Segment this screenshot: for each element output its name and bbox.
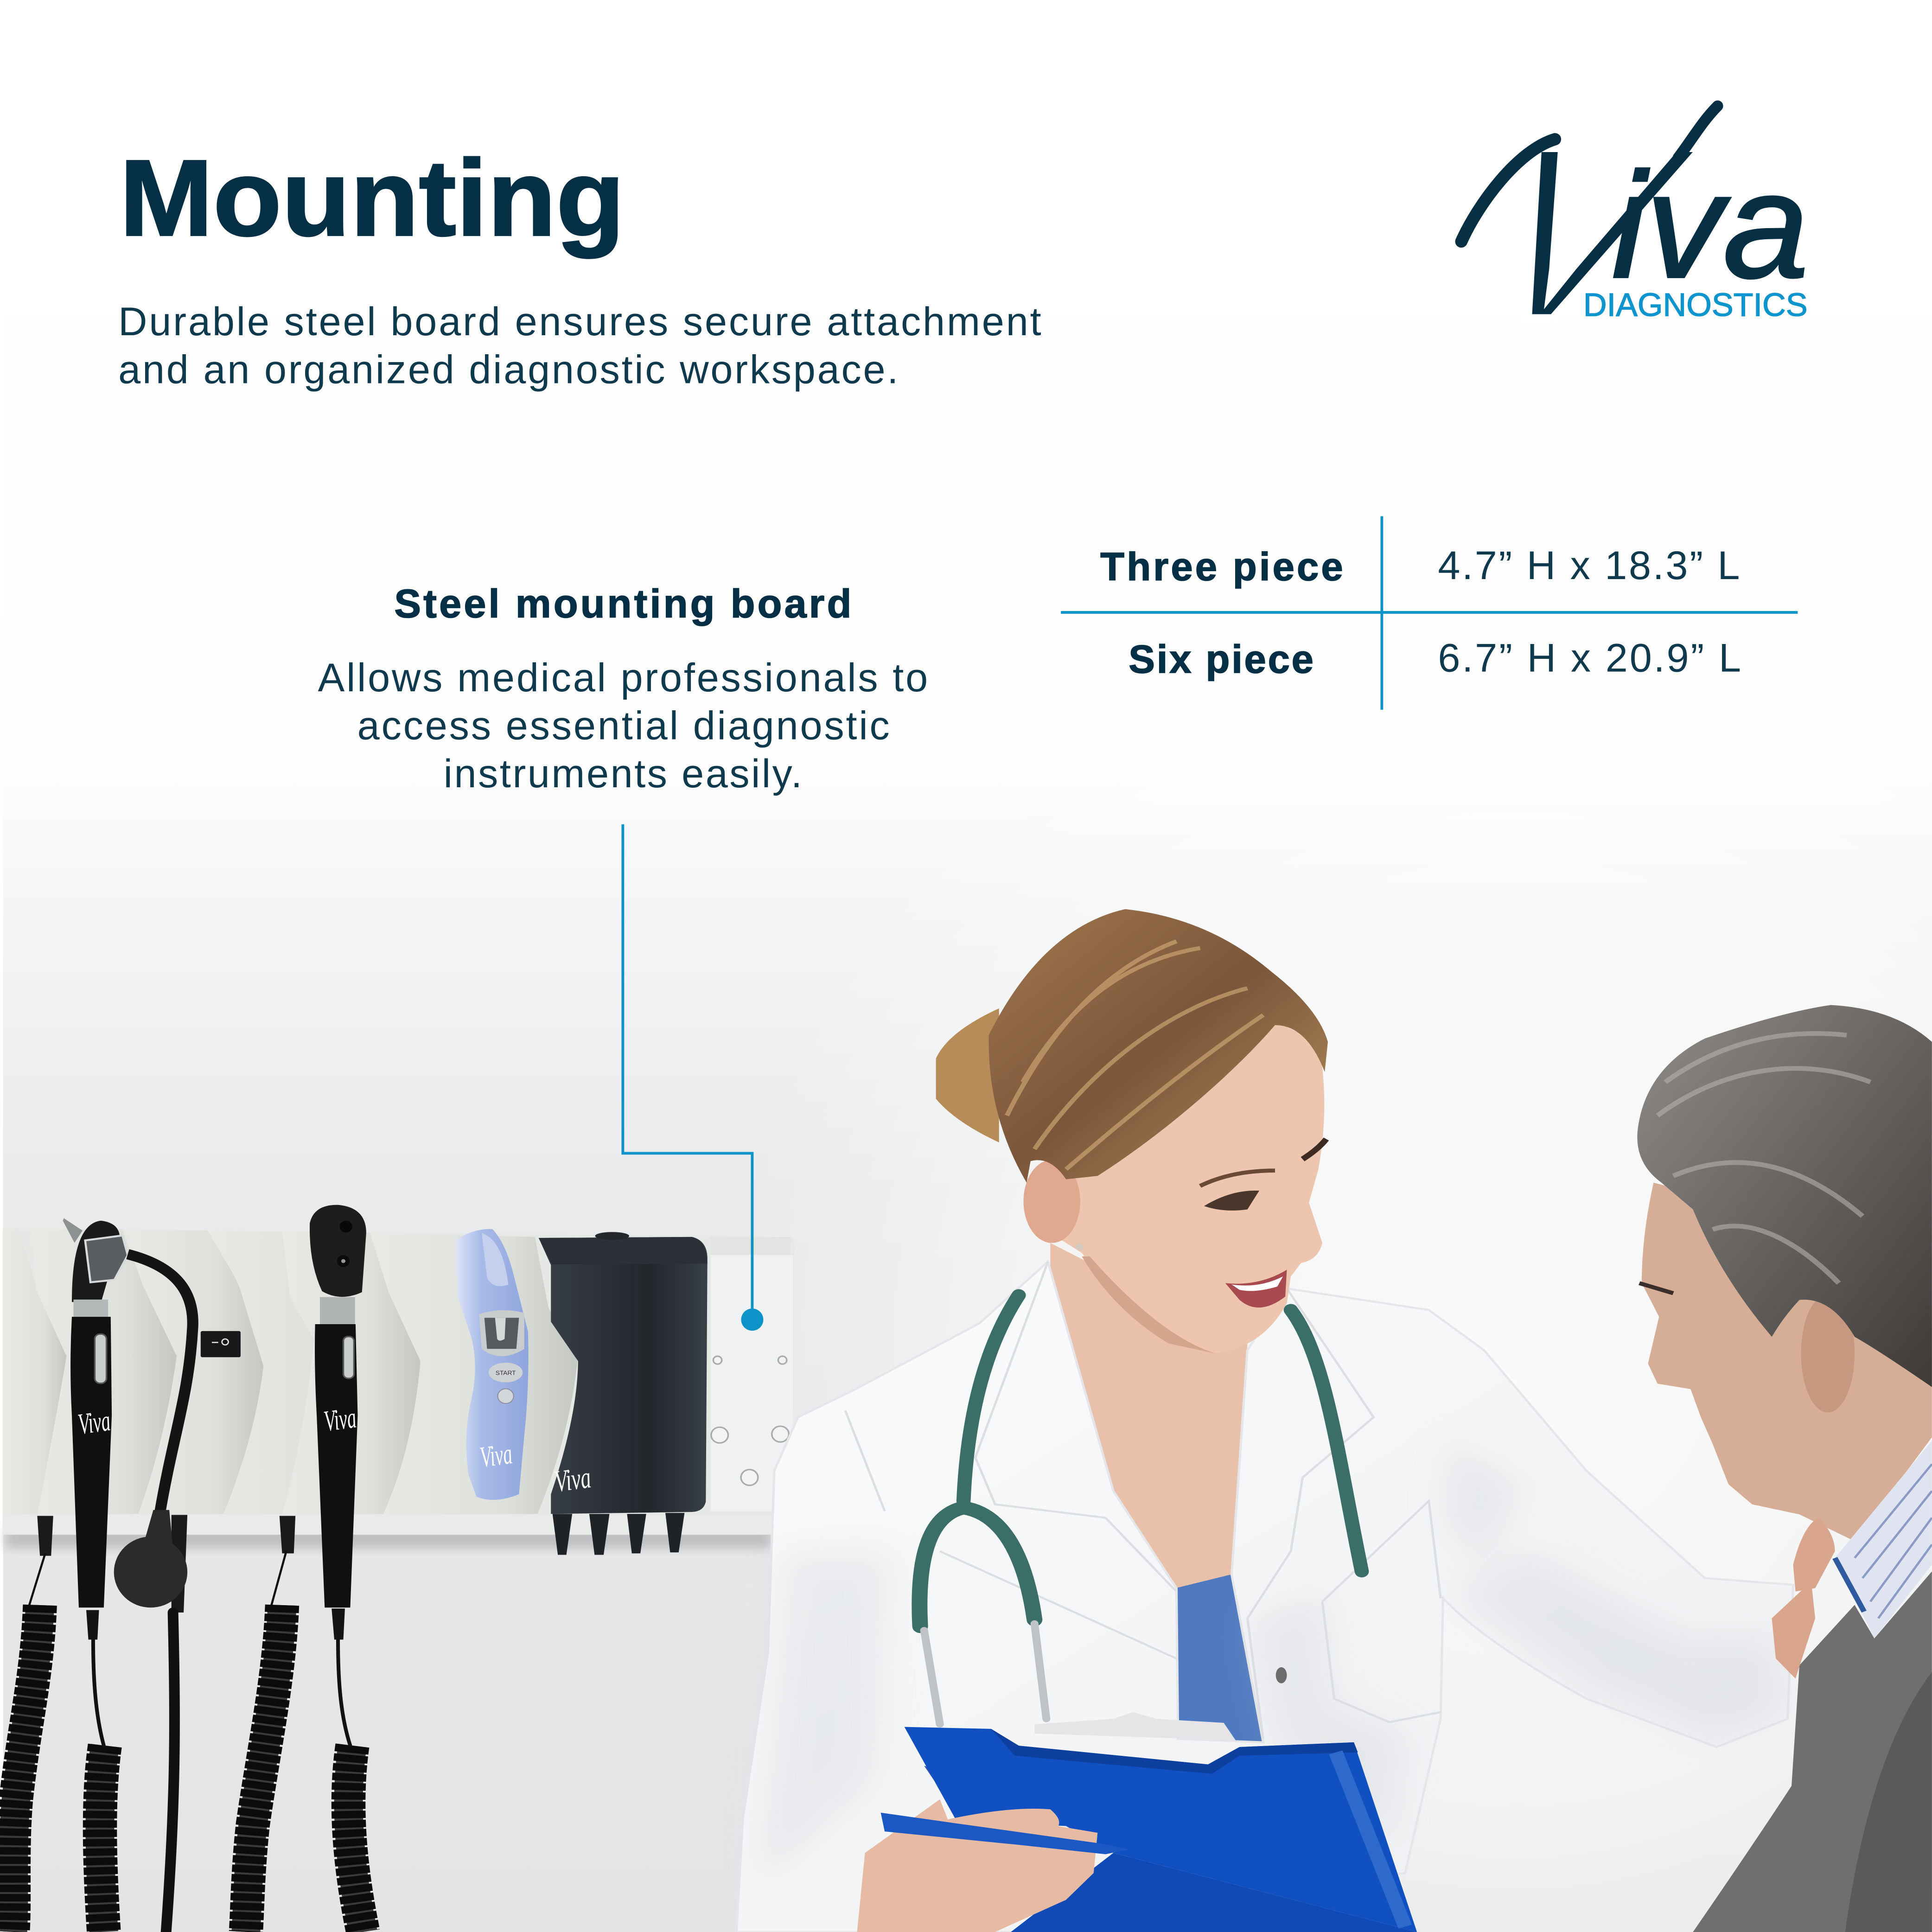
row: three piece (1100, 543, 1740, 589)
logo subtitle: DIAGNOSTICS (1583, 287, 1808, 323)
callout: steel mounting board (318, 581, 928, 1331)
doctor: hand on shoulder (1772, 1518, 1835, 1679)
logo: Viva Diagnostics (1433, 95, 1809, 370)
steel mounting board (3, 1228, 794, 1535)
title: Mounting (120, 137, 625, 259)
coiled tube and bulb (114, 1254, 193, 1607)
thin handle leads and power cable (93, 1613, 350, 1932)
row: six piece (1129, 636, 1741, 682)
intro text: Durable steel board ensures secure attachment (118, 300, 1041, 344)
clipboard (905, 1712, 1417, 1932)
doctor: stethoscope (919, 1295, 1362, 1724)
doctor: hair (936, 909, 1328, 1183)
coat shading (759, 1437, 1784, 1887)
instrument handle: otoscope (63, 1218, 128, 1639)
doctor: white coat (736, 1262, 1793, 1932)
power switch (201, 1331, 241, 1357)
charging handle sockets (37, 1515, 295, 1613)
box brand label: Viva (552, 1460, 593, 1498)
thermometer brand label: Viva (478, 1437, 514, 1474)
row: six piece: Six piece (1129, 638, 1314, 682)
callout heading: Steel mounting board (394, 581, 851, 626)
photo: doctor and patient (736, 909, 1932, 1932)
callout body: instruments easily. (444, 752, 802, 796)
instrument handle: ophthalmoscope: Viva (322, 1402, 358, 1438)
row: six piece: 6.7” H x 20.9” L (1438, 636, 1741, 680)
doctor: blue shirt (1176, 1574, 1265, 1742)
callout body: Allows medical professionals to (318, 656, 928, 700)
doctor: hand and pen (857, 1799, 1129, 1932)
thermometer button label: START (496, 1370, 516, 1376)
callout dot (741, 1308, 763, 1331)
patient: hair (1637, 1005, 1932, 1387)
patient: shirt collar (1835, 1441, 1932, 1639)
wall-mounted diagnostic board (3, 1205, 794, 1932)
dark dispenser box (539, 1232, 708, 1555)
doctor: head (1023, 1008, 1326, 1353)
table lines (1061, 516, 1798, 710)
row: three piece: 4.7” H x 18.3” L (1438, 543, 1740, 588)
intro text: and an organized diagnostic workspace. (118, 347, 898, 392)
instrument handle: otoscope: Viva (76, 1404, 113, 1441)
callout body: access essential diagnostic (357, 704, 890, 748)
instrument handle: ophthalmoscope (310, 1205, 366, 1639)
callout body (318, 656, 928, 796)
dimensions table (1061, 516, 1798, 710)
module housings (3, 1229, 578, 1515)
patient: neck and face (1639, 1183, 1932, 1541)
doctor: neck and chest (1050, 1243, 1247, 1588)
infrared thermometer (455, 1229, 529, 1500)
intro text (118, 300, 1041, 392)
callout connector (623, 824, 752, 1319)
logo: Viva Diagnostics: iva (1612, 141, 1809, 309)
board shadow (5, 1529, 772, 1549)
patient: sweater (1693, 1571, 1932, 1932)
coiled cords (13, 1551, 363, 1932)
logo script wordmark: V (1433, 95, 1727, 370)
row: three piece: Three piece (1100, 545, 1343, 589)
